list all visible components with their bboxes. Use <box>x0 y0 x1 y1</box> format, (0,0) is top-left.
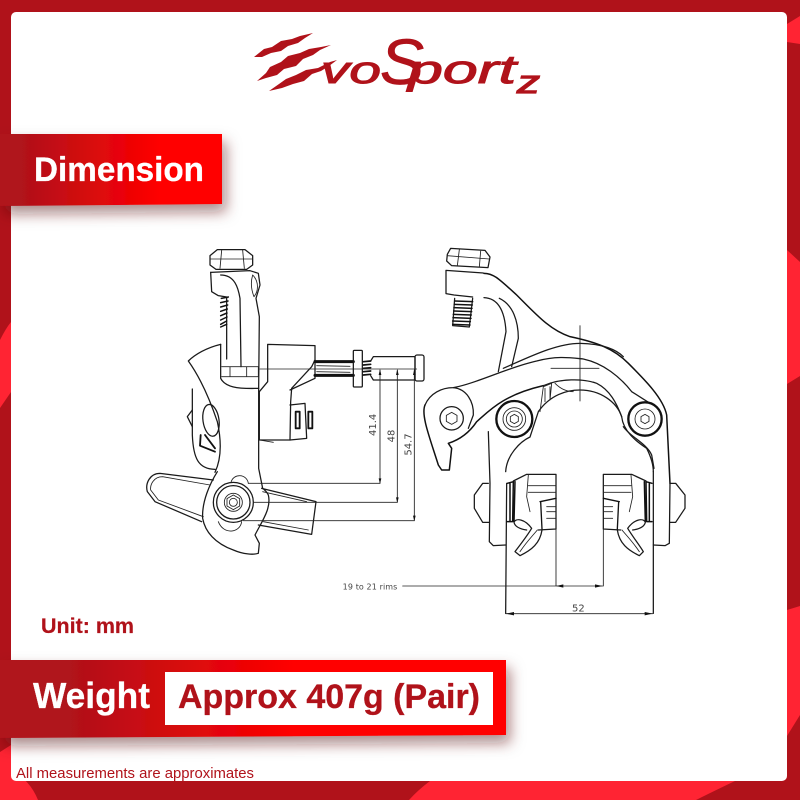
dimension: rim width <box>343 529 603 591</box>
caliper body <box>187 344 259 472</box>
centre line <box>260 368 417 370</box>
logo wordmark: vo <box>321 50 381 92</box>
weight heading: Weight <box>33 675 150 716</box>
quick release levers <box>147 473 316 534</box>
dimension: 52 <box>506 604 653 615</box>
dimension label 54.7: 54.7 <box>404 433 415 456</box>
arch <box>506 380 653 472</box>
weight value box: Approx 407g (Pair) <box>178 678 480 716</box>
diagram: side view of brake caliper <box>147 250 424 554</box>
pivot bolt and lower body <box>203 472 269 554</box>
logo: EvoSportz <box>254 26 540 100</box>
front arm and hook <box>424 357 650 470</box>
right brake pad <box>603 474 652 556</box>
brake pad block <box>259 344 315 442</box>
mounting bolt thread <box>221 297 228 327</box>
logo: EvoSportz: port <box>406 48 519 92</box>
dimension label 48: 48 <box>386 430 397 442</box>
weight value box <box>165 672 493 725</box>
top nut <box>447 248 490 268</box>
weight banner <box>0 660 506 738</box>
logo: EvoSportz: S <box>380 26 424 98</box>
mounting bolt thread <box>453 298 473 327</box>
right pivot bolt <box>628 402 662 436</box>
icon: claw marks <box>254 33 337 91</box>
caliper legs <box>488 427 670 613</box>
unit note: Unit: mm <box>41 615 134 638</box>
caliper arm <box>211 271 263 488</box>
dimension label 41.4: 41.4 <box>368 414 379 436</box>
diagram: front view of brake caliper <box>343 248 685 615</box>
left brake pad <box>507 474 556 556</box>
mount block <box>446 270 483 297</box>
mounting nut <box>210 250 253 269</box>
right axle caps <box>670 483 685 522</box>
rim width label: 19 to 21 rims <box>343 582 397 591</box>
centre cross lines <box>551 326 599 401</box>
logo: EvoSportz: z <box>516 64 540 100</box>
label 52: 52 <box>572 604 585 615</box>
heading banner: Dimension: Dimension <box>34 151 204 189</box>
dimension lines <box>243 369 416 521</box>
left pivot bolt <box>496 401 532 437</box>
left axle caps <box>474 483 489 522</box>
adjuster bolt <box>315 350 424 387</box>
upper arm <box>484 273 670 483</box>
heading banner: Dimension <box>0 134 222 206</box>
footnote: All measurements are approximates <box>16 765 254 782</box>
